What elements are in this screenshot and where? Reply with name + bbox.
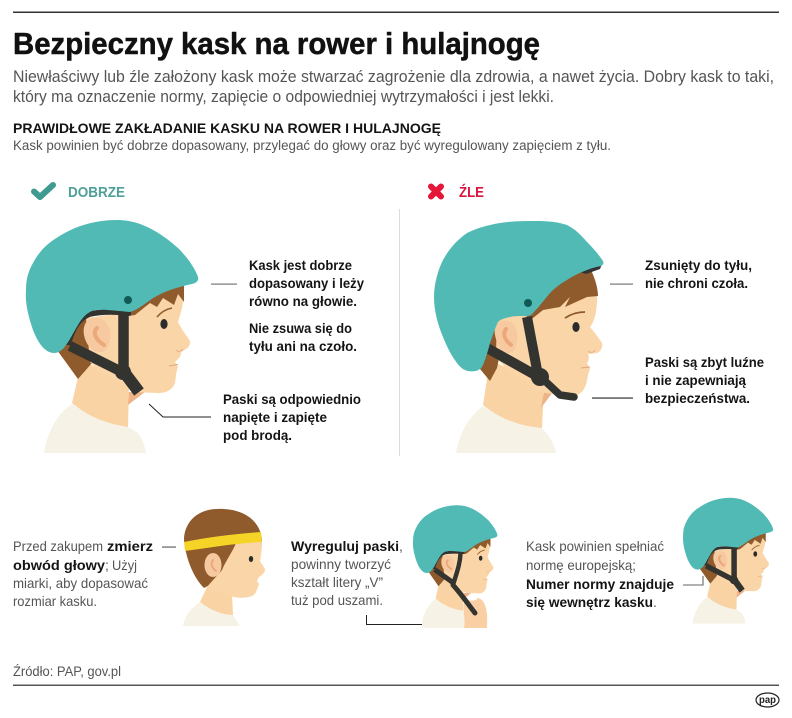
text: measure head: Użyj [112,557,137,573]
text: helmet fit: Kask jest dobrze [249,257,352,273]
text: straps: pod brodą. [223,427,292,443]
text: norm [526,538,674,610]
leader line: helmet fit [211,284,237,285]
text: pushed back: Zsunięty do tyłu, [645,257,752,273]
text: adjust straps [291,538,403,608]
leader line: pushed back [610,284,633,285]
text: measure head: miarki, aby dopasować [13,575,148,591]
logo: pap: pap [759,695,776,706]
panel: bad example [431,184,764,453]
illustration: head with measuring band [183,509,265,626]
divider [399,209,400,456]
text: straps [223,391,361,443]
step: measure head [13,509,265,626]
text: norm: . [653,594,657,610]
text: measure head: rozmiar kasku. [13,593,97,609]
text: straps: napięte i zapięte [223,409,327,425]
text: measure head: obwód głowy [13,557,105,573]
text: loose straps [645,354,764,406]
text: norm: Kask powinien spełniać [526,538,664,554]
text: helmet fit: tyłu ani na czoło. [249,338,357,354]
illustration: helmet from the side [683,498,773,624]
leader line: loose straps [592,398,633,399]
bottom rule [13,684,779,686]
intro text: który ma oznaczenie normy, zapięcie o odpowiedniej wytrzymałości i jest lekki. [13,88,554,106]
illustration: correctly fitted helmet [26,220,198,453]
text: helmet fit [249,257,364,354]
section heading: PRAWIDŁOWE ZAKŁADANIE KASKU NA ROWER I HULAJNOGĘ [13,120,441,136]
step: check norm [526,498,773,624]
text: measure head: zmierz [107,538,153,554]
source: Źródło: PAP, gov.pl [13,663,121,679]
text: loose straps: bezpieczeństwa. [645,390,750,406]
text: loose straps: i nie zapewniają [645,372,746,388]
text: norm: normę europejską; [526,557,636,573]
text: helmet fit: równo na głowie. [249,293,357,309]
illustration: child adjusting strap [413,505,497,628]
text: measure head: ; [105,557,109,573]
leader line: straps [149,404,211,417]
leader line: headband [162,546,176,548]
text: helmet fit: Nie zsuwa się do [249,320,352,336]
title: Bezpieczny kask na rower i hulajnogę [13,26,540,61]
icon: check mark [34,185,53,197]
leader line: norm [683,576,703,585]
intro text [13,68,774,106]
text: norm: się wewnętrz kasku [526,594,653,610]
intro text: Niewłaściwy lub źle założony kask może stwarzać zagrożenie dla zdrowia, a nawet życia. Dobry kask to taki, [13,68,774,86]
label: dobrze: DOBRZE [68,185,125,201]
text: helmet fit: dopasowany i leży [249,275,364,291]
text: measure head: Przed zakupem [13,538,103,554]
text: norm: Numer normy znajduje [526,576,674,592]
step: adjust straps [291,505,497,628]
section subheading: Kask powinien być dobrze dopasowany, przylegać do głowy oraz być wyregulowany zapięciem z tyłu. [13,138,611,153]
text: adjust straps: powinny tworzyć [291,556,391,572]
text: pushed back: nie chroni czoła. [645,275,748,291]
text: straps: Paski są odpowiednio [223,391,361,407]
label: źle: ŹLE [459,184,484,201]
icon: red cross [431,186,441,196]
logo: pap [756,693,779,707]
text: adjust straps: kształt litery „V” [291,574,383,590]
text: adjust straps: , [399,538,403,554]
text: adjust straps: Wyreguluj paski [291,538,399,554]
leader line: hand [366,615,465,624]
text: adjust straps: tuż pod uszami. [291,592,383,608]
panel: good example [26,185,364,453]
text: loose straps: Paski są zbyt luźne [645,354,764,370]
top rule [13,12,779,13]
text: measure head [13,538,153,609]
text: pushed back [645,257,752,291]
illustration: badly fitted helmet [434,221,603,453]
